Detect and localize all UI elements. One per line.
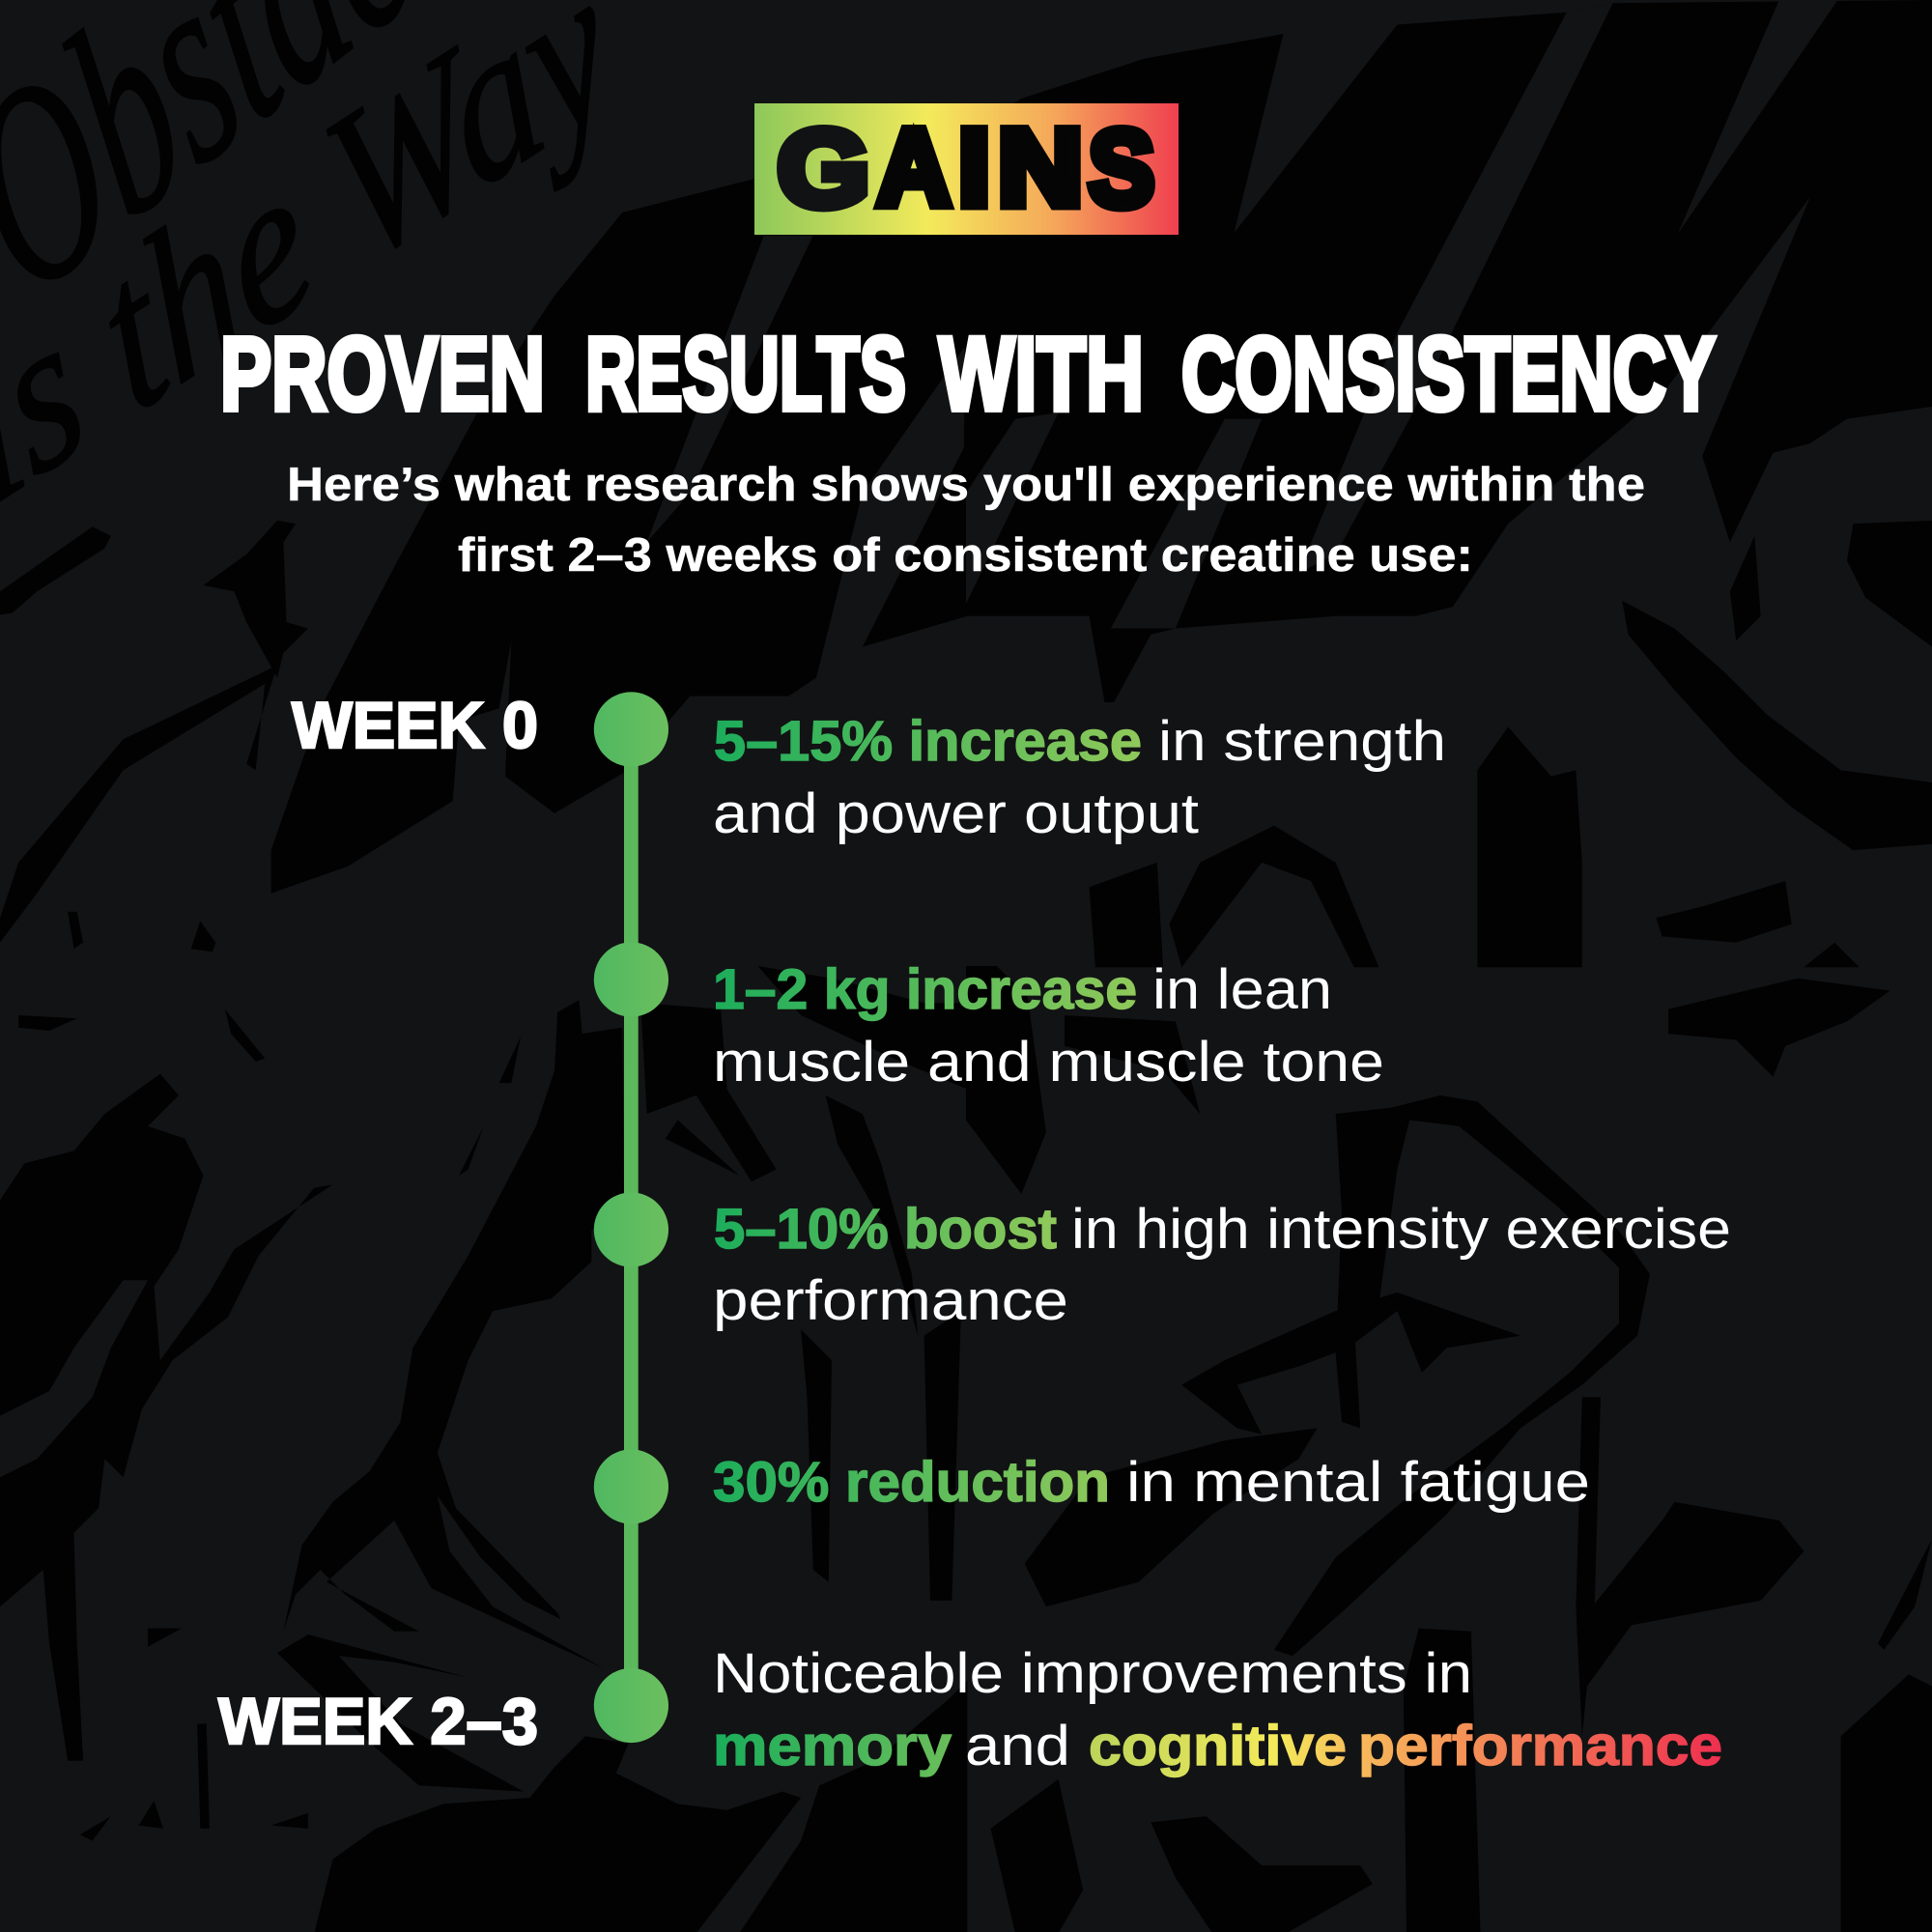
item: exercise performance: performance bbox=[713, 1269, 1068, 1332]
item: mental fatigue: in mental fatigue bbox=[1126, 1451, 1590, 1514]
item: memory and cognition bbox=[713, 1642, 1722, 1777]
title: PROVEN bbox=[220, 315, 545, 432]
item: strength bbox=[713, 710, 1446, 845]
logo: GAINS gradient badge bbox=[754, 103, 1179, 235]
item: memory and cognition: cognitive bbox=[1089, 1715, 1347, 1777]
item: memory and cognition: performance bbox=[1358, 1715, 1722, 1777]
item: memory and cognition: and bbox=[965, 1715, 1070, 1777]
item: lean muscle: in lean bbox=[1152, 958, 1332, 1021]
item: strength: in strength bbox=[1158, 710, 1446, 773]
title bbox=[220, 315, 1716, 432]
item: mental fatigue bbox=[713, 1451, 1590, 1514]
node: lean muscle bbox=[594, 942, 668, 1017]
item: lean muscle: 1–2 kg increase bbox=[713, 958, 1137, 1021]
logo: GAINS gradient badge: A bbox=[877, 107, 951, 228]
subtitle: Here’s what research shows you'll experience within the bbox=[287, 459, 1645, 511]
label: week 0: WEEK 0 bbox=[292, 689, 538, 762]
logo: GAINS gradient badge: G bbox=[778, 108, 869, 229]
item: mental fatigue: 30% reduction bbox=[713, 1451, 1110, 1514]
item: exercise performance: 5–10% boost bbox=[714, 1198, 1057, 1261]
subtitle bbox=[287, 459, 1645, 582]
node: week 0 bbox=[594, 692, 668, 767]
item: strength: 5–15% increase bbox=[714, 710, 1142, 773]
subtitle: first 2–3 weeks of consistent creatine use: bbox=[458, 529, 1473, 582]
item: exercise performance: in high intensity exercise bbox=[1071, 1198, 1731, 1261]
logo: GAINS gradient badge: I bbox=[958, 107, 990, 228]
node: mental fatigue bbox=[594, 1449, 668, 1524]
title: WITH bbox=[939, 315, 1144, 432]
logo: GAINS gradient badge: N bbox=[998, 107, 1083, 228]
item: memory and cognition: Noticeable improvements in bbox=[713, 1642, 1472, 1705]
item: lean muscle bbox=[713, 958, 1384, 1094]
title: RESULTS bbox=[585, 315, 906, 432]
timeline bbox=[594, 692, 668, 1743]
label: week 2-3: WEEK 2–3 bbox=[218, 1685, 538, 1758]
timeline line bbox=[624, 729, 639, 1705]
node: week 2-3 bbox=[594, 1668, 668, 1743]
item: lean muscle: muscle and muscle tone bbox=[713, 1031, 1384, 1094]
item: memory and cognition: memory bbox=[713, 1715, 952, 1777]
node: high intensity bbox=[594, 1192, 668, 1267]
item: exercise performance bbox=[713, 1198, 1731, 1332]
item: strength: and power output bbox=[713, 782, 1199, 845]
title: CONSISTENCY bbox=[1181, 315, 1716, 432]
logo: GAINS gradient badge: S bbox=[1089, 108, 1154, 229]
